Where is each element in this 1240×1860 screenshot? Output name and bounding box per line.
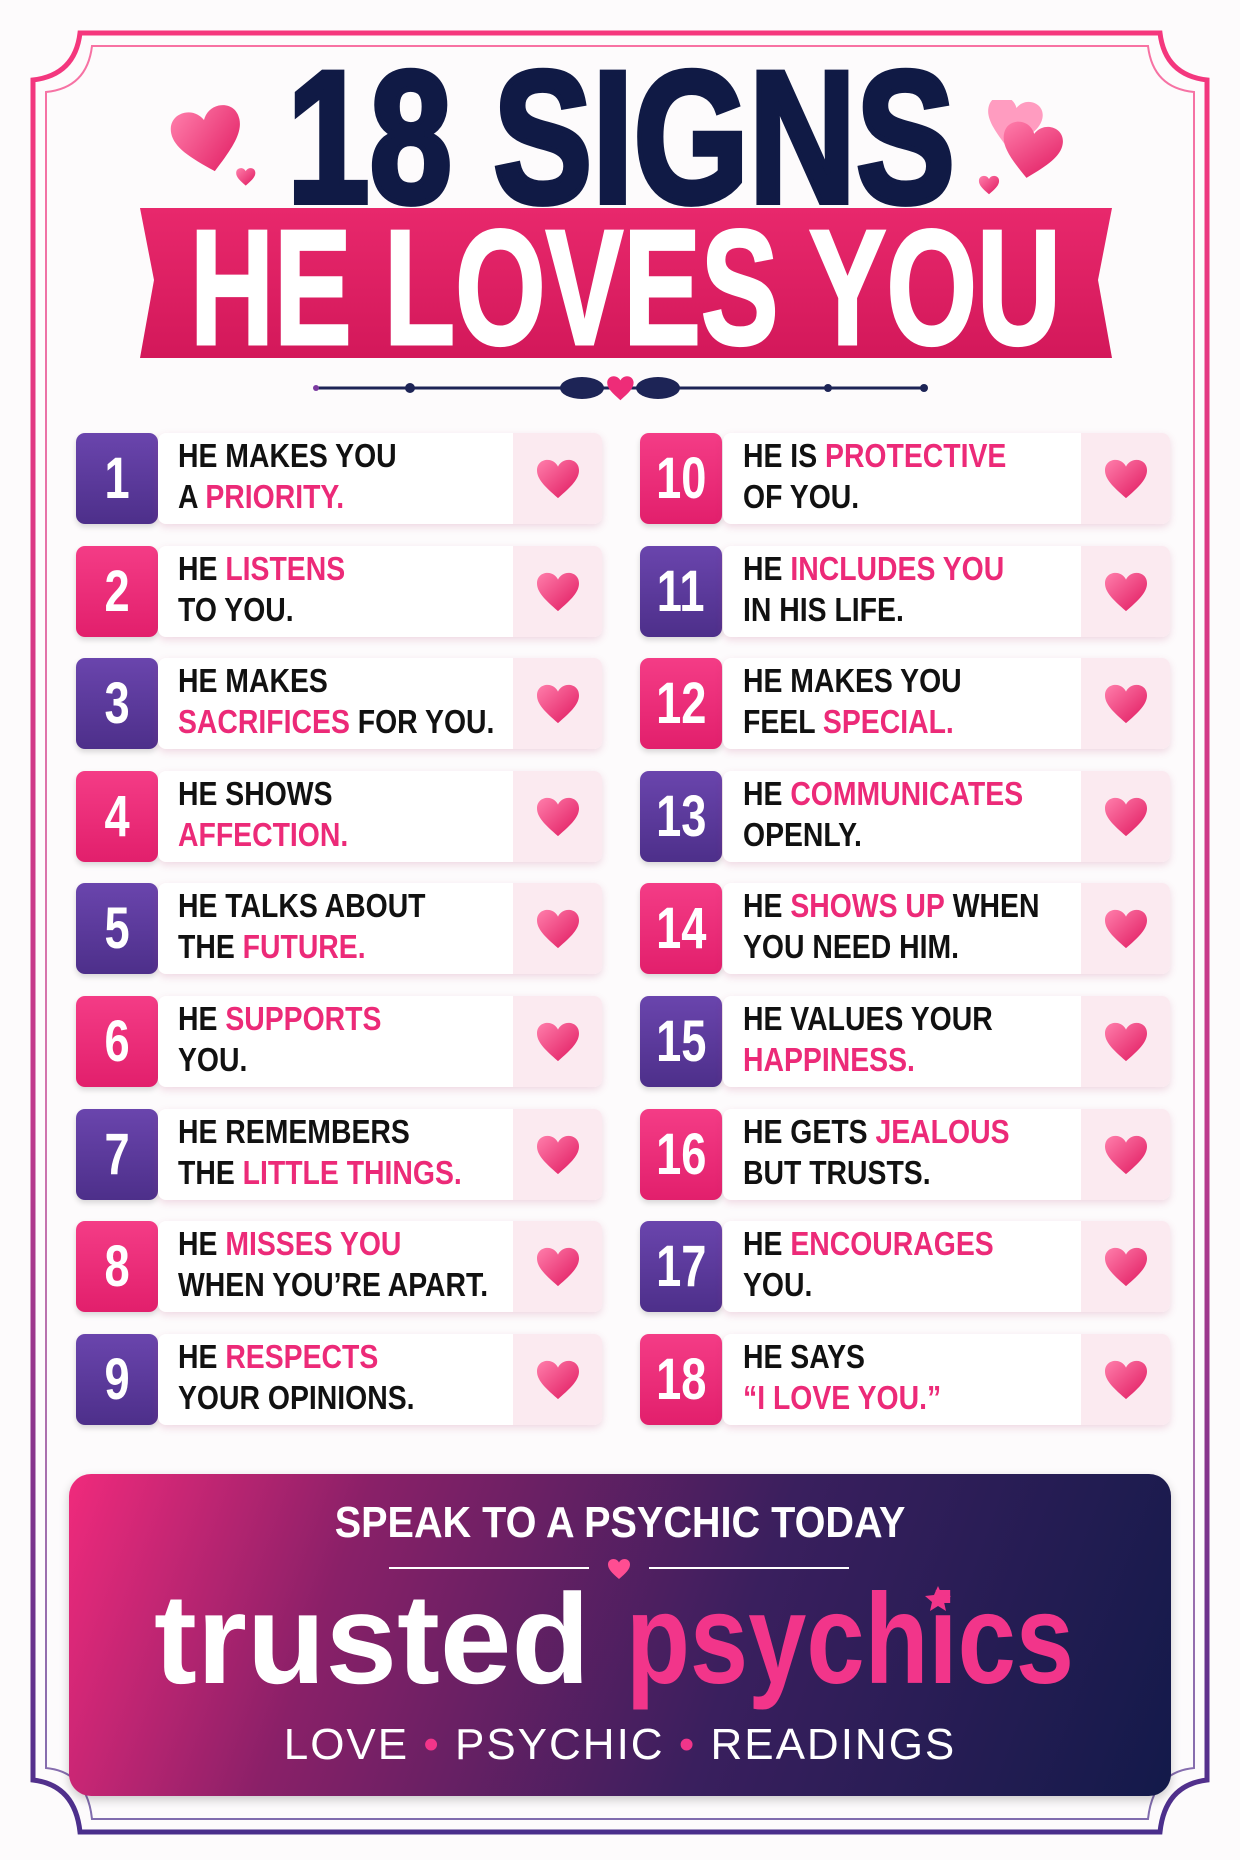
item 2 [74, 546, 605, 643]
item 16: BUT TRUSTS. [743, 1154, 931, 1191]
item 5: HE TALKS ABOUT [178, 887, 426, 924]
item 13 [638, 771, 1173, 868]
item 4: HE SHOWS [178, 775, 333, 812]
item 5: THE FUTURE. [178, 928, 366, 965]
item 17: YOU. [743, 1266, 812, 1303]
item 8: 8 [104, 1234, 130, 1299]
item 18: “I LOVE YOU.” [743, 1379, 941, 1416]
cta divider with heart [389, 1559, 849, 1579]
item 11: IN HIS LIFE. [743, 591, 904, 628]
item 1 [74, 433, 605, 530]
item 10: OF YOU. [743, 478, 859, 515]
item 16: 16 [656, 1122, 706, 1187]
item 6: HE SUPPORTS [178, 1000, 381, 1037]
icon: hearts right [978, 100, 1063, 194]
item 7 [74, 1109, 605, 1206]
item 6: YOU. [178, 1041, 247, 1078]
item 3: SACRIFICES FOR YOU. [178, 703, 494, 740]
item 4: AFFECTION. [178, 816, 348, 853]
item 10 [638, 433, 1173, 530]
item 18: 18 [656, 1347, 706, 1412]
item 6: 6 [104, 1009, 130, 1074]
item 4: 4 [104, 784, 130, 849]
item 12: FEEL SPECIAL. [743, 703, 954, 740]
item 8: WHEN YOU’RE APART. [178, 1266, 488, 1303]
item 17: HE ENCOURAGES [743, 1225, 994, 1262]
item 11 [638, 546, 1173, 643]
item 17 [638, 1221, 1173, 1318]
item 8 [74, 1221, 605, 1318]
item 1: 1 [104, 446, 130, 511]
item 3: HE MAKES [178, 662, 328, 699]
item 12 [638, 658, 1173, 755]
cta heading: SPEAK TO A PSYCHIC TODAY [335, 1498, 905, 1547]
item 16 [638, 1109, 1173, 1206]
item 15: 15 [656, 1009, 706, 1074]
item 15: HAPPINESS. [743, 1041, 915, 1078]
item 11: 11 [657, 559, 705, 624]
item 2: 2 [104, 559, 130, 624]
item 1: HE MAKES YOU [178, 437, 397, 474]
item 13: OPENLY. [743, 816, 862, 853]
item 13: HE COMMUNICATES [743, 775, 1023, 812]
item 18: HE SAYS [743, 1338, 865, 1375]
item 3: 3 [104, 671, 130, 736]
item 3 [74, 658, 605, 755]
item 6 [74, 996, 605, 1093]
item 8: HE MISSES YOU [178, 1225, 401, 1262]
item 14 [638, 883, 1173, 980]
item 4 [74, 771, 605, 868]
item 17: 17 [656, 1234, 706, 1299]
item 10: 10 [656, 446, 706, 511]
item 14: YOU NEED HIM. [743, 928, 959, 965]
divider ornament [313, 376, 928, 400]
item 10: HE IS PROTECTIVE [743, 437, 1006, 474]
item 18 [638, 1334, 1173, 1431]
item 12: 12 [656, 671, 706, 736]
panel: CTA [69, 1474, 1171, 1796]
item 15 [638, 996, 1173, 1093]
item 16: HE GETS JEALOUS [743, 1113, 1010, 1150]
item 13: 13 [656, 784, 706, 849]
logo: trusted psychics [154, 1574, 1074, 1711]
item 15: HE VALUES YOUR [743, 1000, 993, 1037]
item 5: 5 [104, 896, 130, 961]
item 5 [74, 883, 605, 980]
item 11: HE INCLUDES YOU [743, 550, 1004, 587]
item 2: HE LISTENS [178, 550, 345, 587]
item 12: HE MAKES YOU [743, 662, 962, 699]
item 7: 7 [104, 1122, 130, 1187]
item 14: 14 [656, 896, 706, 961]
tagline: LOVE • PSYCHIC • READINGS [284, 1720, 956, 1769]
item 9 [74, 1334, 605, 1431]
item 2: TO YOU. [178, 591, 294, 628]
item 9: YOUR OPINIONS. [178, 1379, 415, 1416]
item 9: 9 [104, 1347, 130, 1412]
item 7: THE LITTLE THINGS. [178, 1154, 462, 1191]
item 14: HE SHOWS UP WHEN [743, 887, 1039, 924]
list: right column [638, 433, 1173, 1431]
item 1: A PRIORITY. [178, 478, 344, 515]
item 7: HE REMEMBERS [178, 1113, 410, 1150]
item 9: HE RESPECTS [178, 1338, 378, 1375]
icon: hearts left [170, 105, 256, 186]
list: left column [74, 433, 605, 1431]
